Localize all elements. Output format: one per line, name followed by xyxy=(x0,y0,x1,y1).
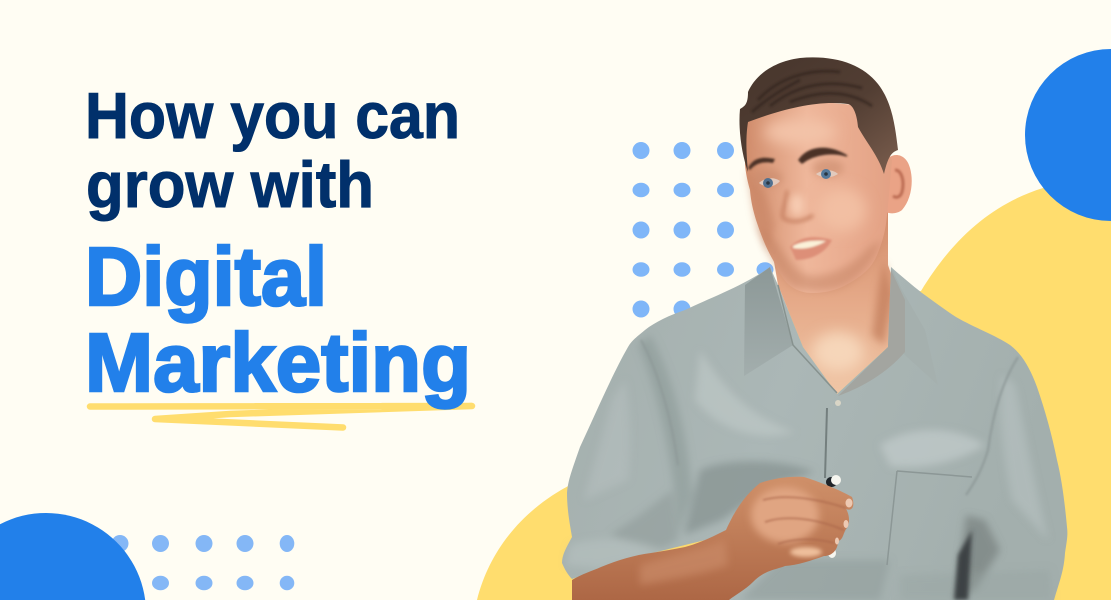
title xyxy=(85,79,471,409)
blue circle bottom left xyxy=(0,513,145,600)
left collar edge xyxy=(778,285,837,393)
forehead highlight xyxy=(764,119,836,145)
left eyebrow xyxy=(748,158,775,170)
face xyxy=(745,100,892,293)
ear inner xyxy=(893,170,903,197)
heading line: Digital: Digital xyxy=(85,230,327,323)
inner collar band xyxy=(838,270,905,396)
forearm and hand xyxy=(572,477,853,600)
neck xyxy=(774,212,891,394)
shirt folds xyxy=(566,335,1052,600)
pocket xyxy=(887,471,972,565)
sleeve seam right xyxy=(966,357,1018,495)
dot grid: lower xyxy=(112,535,294,590)
heading line: How you can: How you can xyxy=(85,79,460,152)
yellow blob xyxy=(477,172,1111,600)
jaw shading xyxy=(756,222,882,291)
nose xyxy=(783,192,812,221)
left collar xyxy=(744,267,793,376)
right collar xyxy=(891,267,892,268)
right eye xyxy=(816,169,838,179)
forearm highlight xyxy=(640,540,728,585)
scribble underline xyxy=(90,406,472,428)
hand highlight xyxy=(751,487,819,543)
nose highlight xyxy=(790,194,804,216)
neck highlight xyxy=(812,332,864,372)
shirt xyxy=(562,267,1067,600)
neck side shadow xyxy=(872,260,893,345)
hair xyxy=(739,57,898,174)
ear xyxy=(886,155,912,213)
cheek highlight xyxy=(818,188,866,232)
right eyebrow xyxy=(799,148,847,163)
shirt button xyxy=(835,400,841,406)
left eye xyxy=(759,178,780,188)
shirt placket xyxy=(825,408,827,478)
finger nails xyxy=(835,498,852,544)
finger lines xyxy=(763,497,846,544)
heading line: grow with: grow with xyxy=(86,148,374,221)
thumb highlight xyxy=(790,547,822,557)
hair strands xyxy=(752,71,872,112)
blue circle top right xyxy=(1025,49,1111,221)
heading line: Marketing: Marketing xyxy=(85,316,471,409)
right shirt shadow xyxy=(954,530,972,600)
eye socket shadows xyxy=(761,158,844,183)
pen xyxy=(826,475,841,558)
mouth xyxy=(790,237,832,260)
dot grid: upper xyxy=(632,142,774,318)
sleeve seam left xyxy=(640,340,644,346)
left face shading xyxy=(747,170,775,250)
person xyxy=(562,57,1067,600)
